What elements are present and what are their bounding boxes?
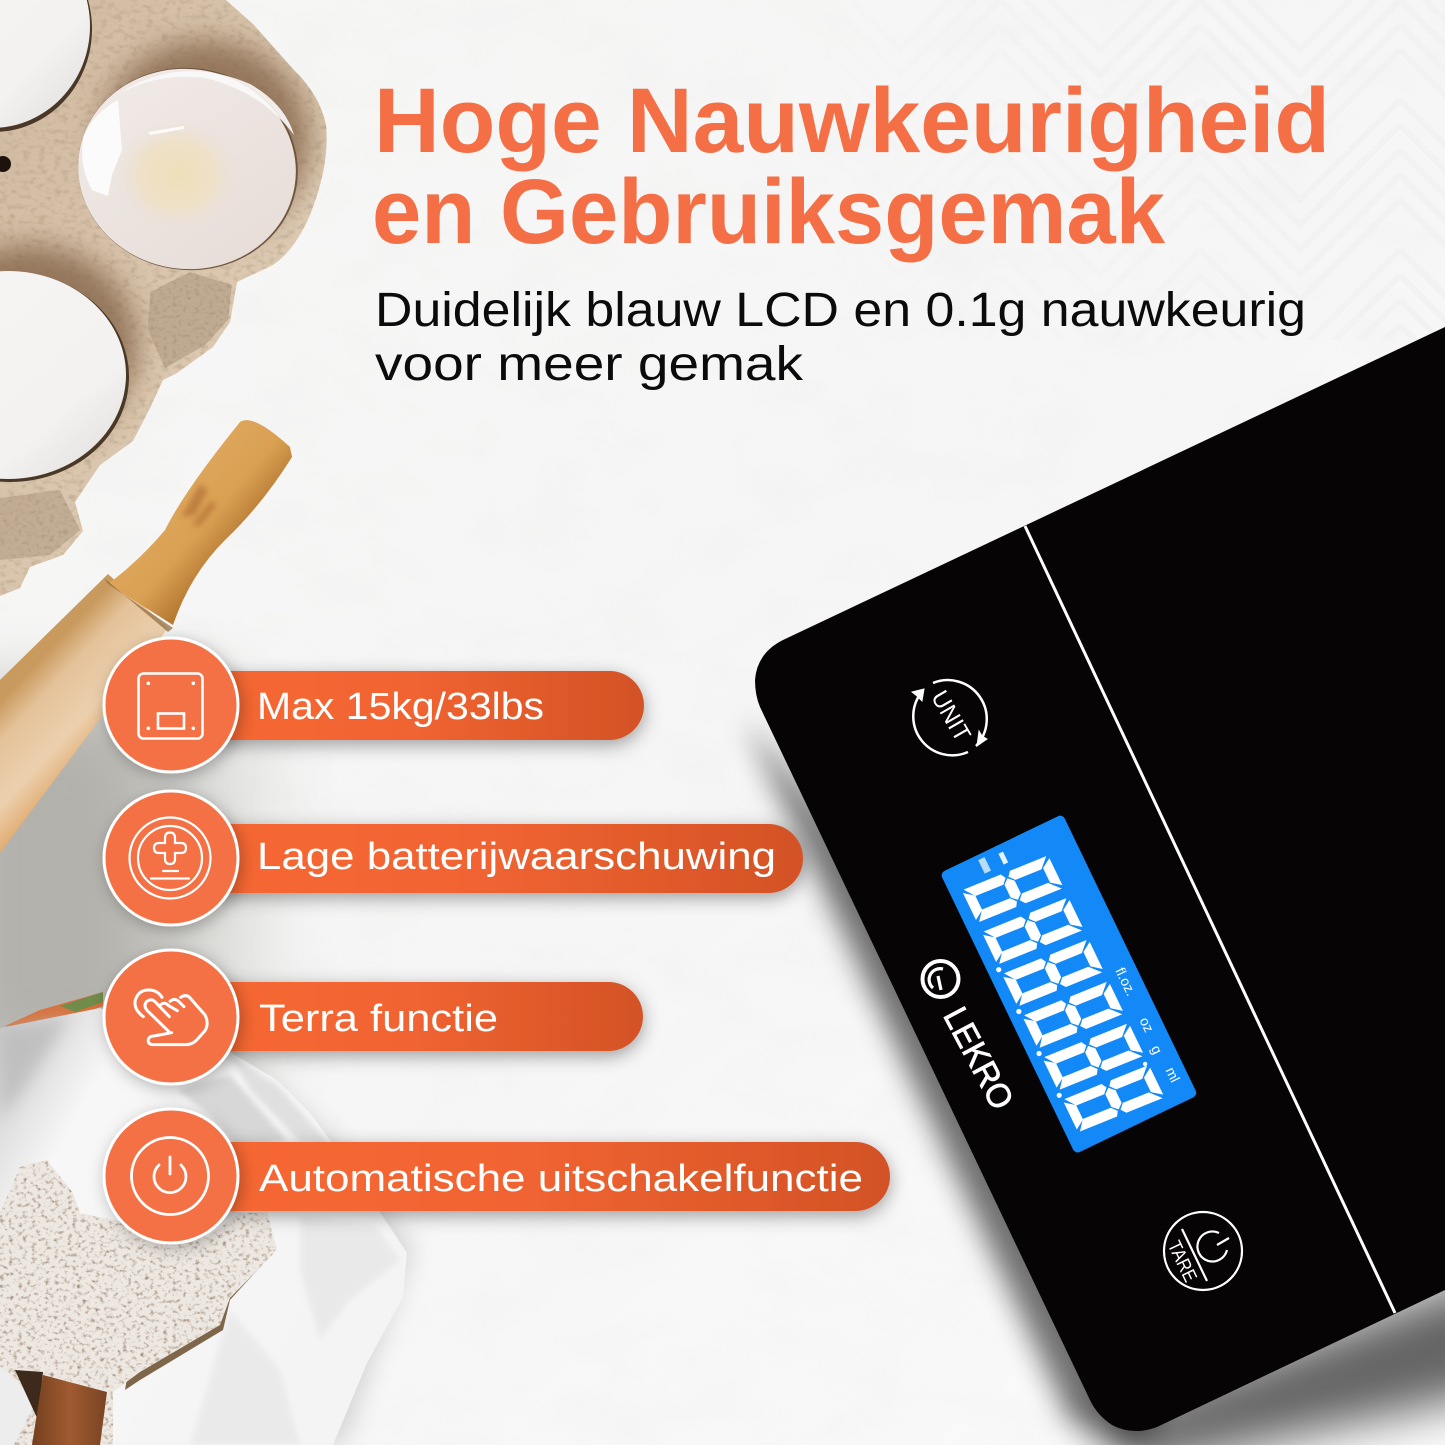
LCD unit labels: g [1148, 1043, 1166, 1057]
pill: low battery [215, 824, 803, 893]
LCD display [940, 814, 1198, 1154]
title [372, 70, 1330, 263]
pill: max capacity [215, 671, 644, 740]
LCD unit labels: fl.oz. [1112, 965, 1140, 998]
photo: egg carton with eggs [0, 0, 327, 596]
subtitle: Duidelijk blauw LCD en 0.1g nauwkeurig [375, 284, 1306, 337]
button: unit: UNIT [925, 686, 976, 747]
carton hole [0, 156, 11, 172]
icon: battery plus [104, 791, 238, 925]
LCD unit labels: oz [1136, 1014, 1157, 1035]
brand logo: LEKRO [936, 1001, 1021, 1116]
scale divider line [1025, 526, 1395, 1313]
subtitle [375, 284, 1306, 391]
egg: cracked open with yolk [65, 54, 311, 284]
brand logo [922, 961, 1021, 1116]
feature: max capacity [104, 638, 644, 772]
title: Hoge Nauwkeurigheid [374, 70, 1330, 172]
LCD unit labels: ml [1162, 1064, 1183, 1085]
label: tare: Terra functie [259, 998, 498, 1040]
egg: lower left [0, 271, 126, 479]
shadow under flour [125, 1265, 262, 1390]
flour pile [0, 1160, 277, 1445]
background: marble surface [0, 648, 296, 1074]
label: max capacity: Max 15kg/33lbs [257, 686, 544, 728]
icon: power [104, 1109, 238, 1243]
title: en Gebruiksgemak [372, 161, 1166, 263]
feature: low battery warning [104, 791, 803, 925]
subtitle: voor meer gemak [375, 338, 804, 391]
label: low battery: Lage batterijwaarschuwing [257, 836, 776, 878]
label: auto off: Automatische uitschakelfunctie [259, 1158, 863, 1200]
feature: tare function [104, 950, 643, 1084]
button: tare: TARE [1163, 1238, 1200, 1286]
scale body [755, 327, 1445, 1431]
LCD unit labels [1112, 965, 1183, 1085]
scale shadow [745, 720, 1445, 1445]
kitchen scale [755, 327, 1445, 1431]
pill: auto off [215, 1142, 890, 1211]
feature: auto power off [104, 1109, 890, 1243]
button: unit [912, 680, 987, 755]
icon: pointing hand [104, 950, 238, 1084]
pill: tare [215, 982, 643, 1051]
photo: flour bag [0, 992, 410, 1445]
photo: rolling pin [0, 420, 292, 853]
icon: scale [104, 638, 238, 772]
egg: top left [0, 0, 90, 128]
button: tare [1163, 1212, 1242, 1290]
wooden spoon [15, 1370, 107, 1445]
